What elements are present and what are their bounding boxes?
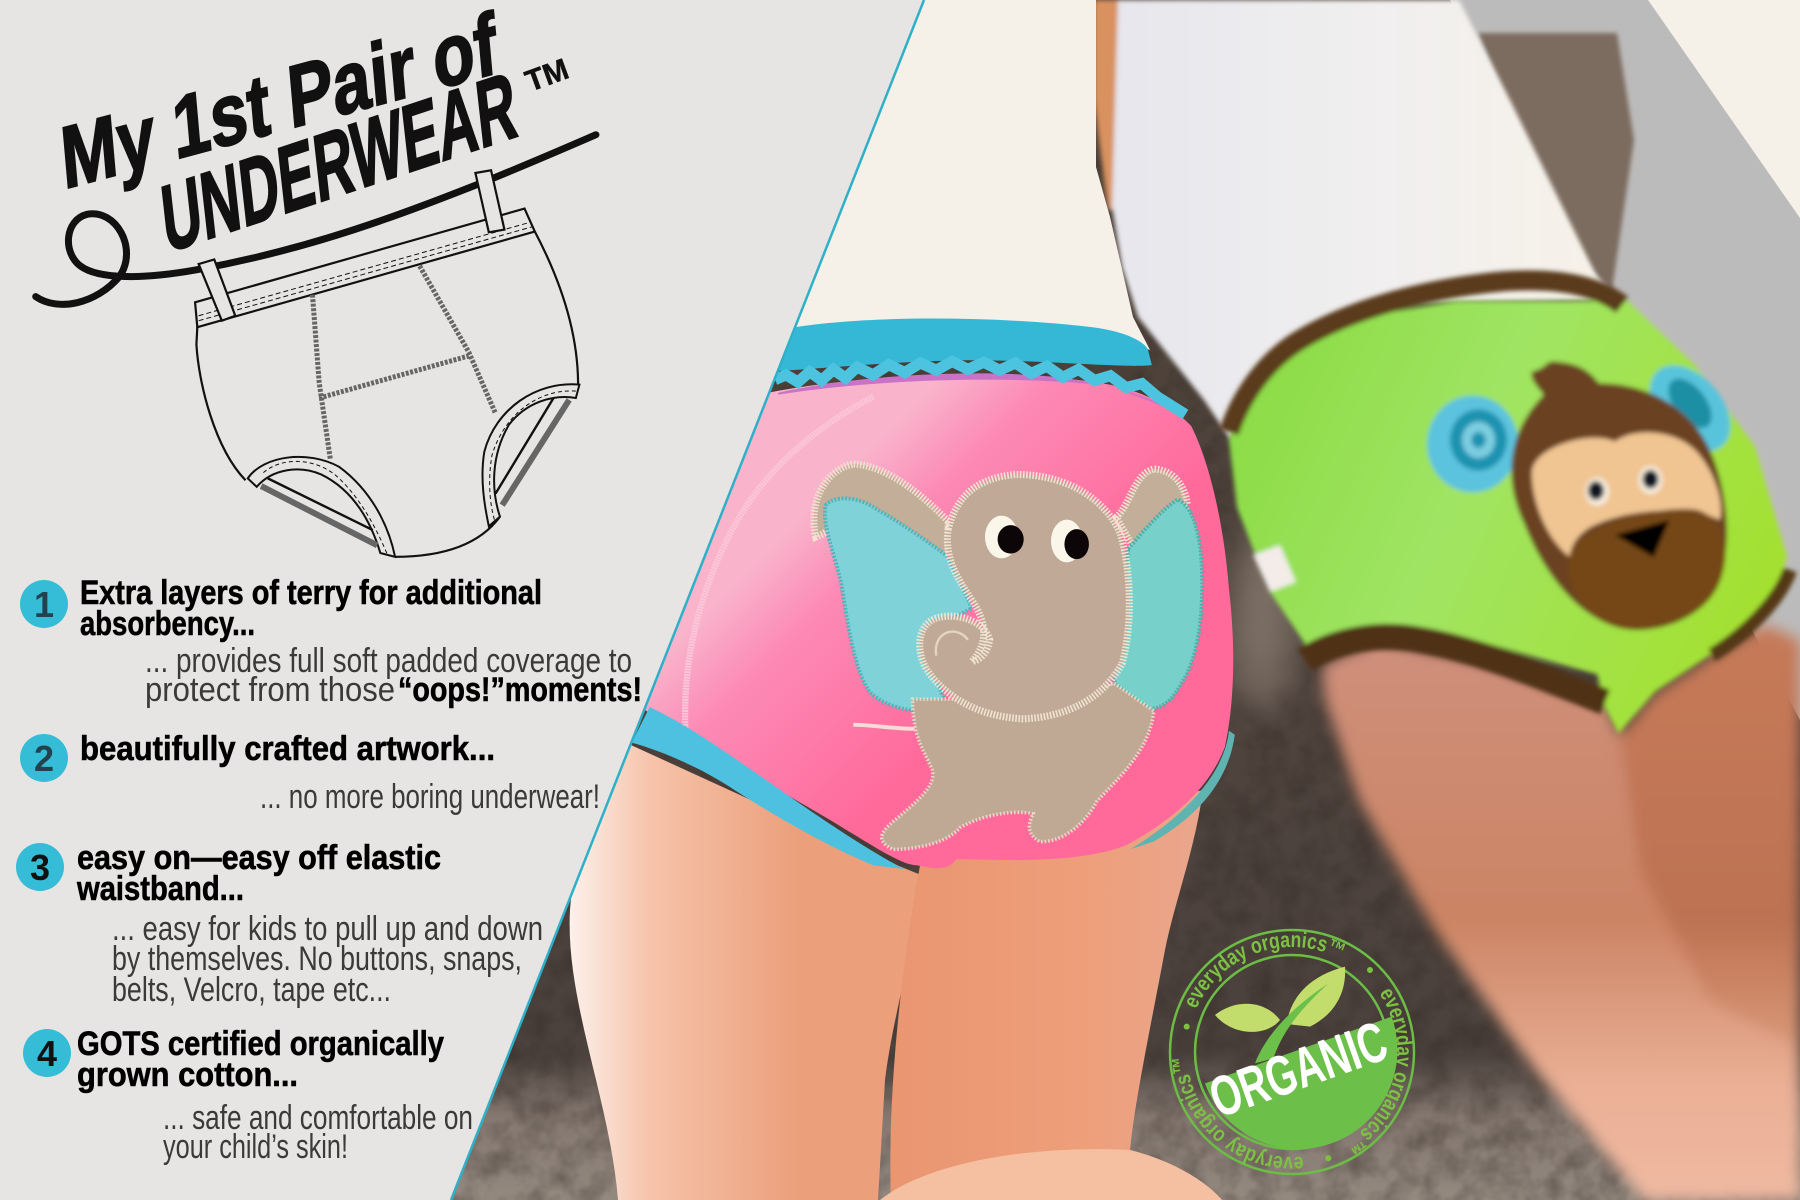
monkey ear right [1633,354,1747,463]
pale pink seam [685,397,873,729]
feature 1 [20,574,642,709]
elephant left ear tan [814,464,948,565]
underwear outline [196,232,578,557]
description 3: belts, Velcro, tape etc... [112,971,391,1009]
textured seams [312,266,496,459]
heading 3: easy on—easy off elastic [77,839,441,877]
clothespin left [199,259,235,321]
brown waistband [1229,280,1622,432]
badge leaves [1215,967,1345,1032]
elephant right ear tan [1116,469,1187,549]
badge drawing [1184,967,1397,1161]
heading 3 [76,839,441,908]
badge 1: 1 [34,584,54,625]
heading 1: Extra layers of terry for additional [80,574,542,612]
description 4: ... safe and comfortable on [163,1099,473,1137]
monkey head [1511,361,1727,630]
description 4 [163,1099,473,1166]
badge stem [1255,983,1328,1063]
elephant tail [853,725,915,729]
left leg opening [248,457,395,557]
teal side trim [1130,731,1235,849]
green fabric [1231,303,1785,730]
clothespin right [475,170,504,232]
right leg trim [502,400,569,505]
care label [1253,545,1296,592]
feature 4 [23,1025,473,1166]
heading 4: grown cotton... [77,1056,298,1094]
trunk spiral [936,632,968,656]
purple shadow [778,373,1174,410]
description 1: protect from those [145,671,395,709]
left panel background [0,0,924,1200]
waistband [195,209,535,327]
badge dots [1184,967,1373,1161]
description 1 [145,642,642,709]
curved badge text left: everyday organics™ [1172,1059,1303,1169]
waistband stitching [199,222,533,321]
underwear line drawing [36,135,596,557]
monkey nose [1615,520,1670,557]
badge 4 [23,1029,71,1077]
description 1: ... provides full soft padded coverage to [145,642,632,680]
elephant body [882,683,1154,849]
photo background: carpeted stairs and wall [400,0,1800,1200]
feature 3 [16,839,543,1009]
description 1: “oops!”moments! [398,671,642,709]
elephant right wing blue [1114,499,1202,709]
badge 2 [20,734,68,782]
badge 1 [20,580,68,628]
pink elephant underwear [632,319,1235,869]
badge 3 [16,843,64,891]
curved badge text right: everyday organics™ [1351,989,1412,1154]
monkey eyes [1585,478,1609,506]
monkey face [1532,433,1721,557]
badge rings [1170,930,1414,1174]
heading 4: GOTS certified organically [77,1025,444,1063]
left leg trim [261,486,377,545]
badge word: ORGANIC [1202,1010,1395,1131]
elephant eyes [985,516,1018,558]
elephant head [920,475,1129,719]
heading 1: absorbency... [80,605,255,643]
clothesline [36,135,596,304]
child two: legs [1322,625,1800,1200]
right leg opening [482,384,579,526]
trademark: TM [521,53,573,99]
heading 1 [80,574,542,643]
monkey ear left [1427,354,1747,630]
blue leg band [632,707,905,869]
right leg band [1712,570,1790,655]
description 3: ... easy for kids to pull up and down [112,910,543,948]
badge 4: 4 [37,1033,57,1074]
curved badge text top: everyday organics™ [1187,932,1346,1008]
organic badge [1168,928,1416,1176]
green monkey underwear [1229,280,1790,730]
monkey muzzle [1568,509,1725,628]
badge half disc [1205,1017,1397,1149]
pink fabric [644,375,1233,868]
ruffle [775,361,1185,414]
badge 3: 3 [30,847,50,888]
teal diagonal divider [451,0,924,1200]
left leg stitching [263,461,387,555]
right leg stitching [490,391,576,520]
heading 2: beautifully crafted artwork... [80,730,495,768]
child two: white shirt [1094,0,1610,440]
feature 2 [20,730,600,816]
description 2: ... no more boring underwear! [260,778,600,816]
heading 3: waistband... [76,870,244,908]
heading 4 [77,1025,444,1094]
description 3 [112,910,543,1009]
badge 2: 2 [34,738,54,779]
title [57,0,573,273]
description 3: by themselves. No buttons, snaps, [112,940,522,978]
child one: shirt and legs [570,0,1222,1200]
blue waistband [778,319,1152,371]
elephant left wing blue [825,498,972,712]
description 4: your child’s skin! [163,1128,348,1166]
brown leg bands [1305,637,1605,702]
